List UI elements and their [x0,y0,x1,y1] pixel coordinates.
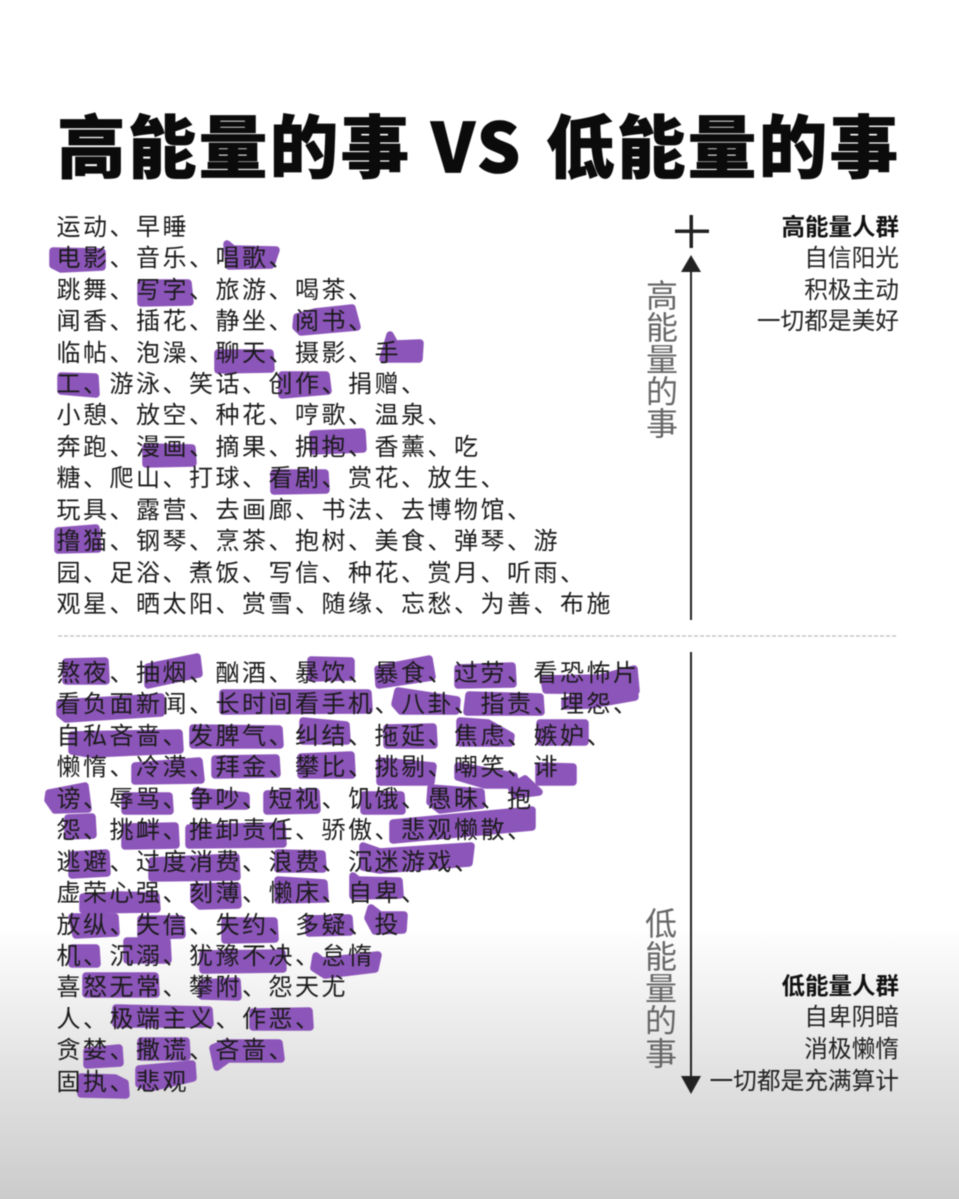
text block: high energy people: 积极主动 [804,277,899,304]
text block: low energy activities: 放纵、失信、失约、多疑、投 [56,912,401,939]
text block: high energy activities: 闻香、插花、静坐、阅书、 [56,308,374,335]
text block: low energy people: 低能量人群 [782,973,899,999]
text block: low energy activities: 贪婪、撒谎、吝啬、 [56,1037,295,1064]
text block: low energy activities: 机、沉溺、犹豫不决、怠惰 [56,943,374,970]
text block: high energy people [757,214,899,335]
text block: high energy activities: 撸猫、钢琴、烹茶、抱树、美食、弹琴、游 [56,528,560,555]
text block: low energy activities: 自私吝啬、发脾气、纠结、拖延、焦虑、嫉妒、 [56,723,613,750]
title [57,94,901,192]
text block: low energy activities: 怨、挑衅、推卸责任、骄傲、悲观懒散、 [56,817,534,844]
text block: low energy people: 自卑阴暗 [804,1004,899,1031]
text block: high energy activities: 观星、晒太阳、赏雪、随缘、忘愁、为善、布施 [56,591,613,618]
text block: high energy activities: 小憩、放空、种花、哼歌、温泉、 [56,402,454,429]
vertical label: low energy [645,906,677,1072]
vertical label: high energy: 事 [646,406,678,442]
vertical label: low energy: 事 [645,1036,677,1072]
text block: high energy activities: 电影、音乐、唱歌、 [56,245,295,272]
title: 低能量的事 [546,94,901,192]
vertical label: low energy: 低 [645,906,677,942]
text block: high energy activities: 工、游泳、笑话、创作、捐赠、 [56,371,428,398]
text block: high energy people: 高能量人群 [782,214,899,240]
text block: low energy people: 消极懒惰 [804,1036,899,1063]
icon: plus sign [675,215,709,248]
text block: low energy activities: 虚荣心强、刻薄、懒床、自卑、 [56,880,428,907]
vertical label: high energy [646,278,678,442]
vertical label: high energy: 的 [646,374,678,410]
text block: low energy activities: 人、极端主义、作恶、 [56,1006,322,1033]
arrow: upward [681,255,701,620]
text block: low energy activities: 固执、悲观 [56,1069,189,1096]
arrow: downward [681,652,701,1094]
text block: low energy activities: 熬夜、抽烟、酗酒、暴饮、暴食、过劳、看恐怖片 [56,660,640,687]
text block: low energy activities: 喜怒无常、攀附、怨天尤 [56,974,348,1001]
vertical label: low energy: 量 [645,971,677,1007]
text block: low energy people: 一切都是充满算计 [709,1068,899,1095]
title: VS [430,94,523,192]
vertical label: high energy: 能 [646,310,678,346]
text block: high energy people: 一切都是美好 [757,308,899,335]
title: 高能量的事 [57,94,412,192]
text block: low energy activities: 谤、辱骂、争吵、短视、饥饿、愚昧、抱 [56,786,534,813]
text block: high energy activities: 玩具、露营、去画廊、书法、去博物馆、 [56,497,534,524]
text block: low energy activities [56,660,640,1096]
text block: high energy activities: 运动、早睡 [56,214,189,241]
highlight strokes: high energy list [53,244,420,550]
text block: high energy activities: 临帖、泡澡、聊天、摄影、手 [56,340,401,367]
highlight strokes: low energy list [48,657,636,1095]
text block: high energy activities: 跳舞、写字、旅游、喝茶、 [56,277,374,304]
text block: low energy people [709,973,899,1095]
text block: high energy people: 自信阳光 [804,245,899,272]
vertical label: low energy: 的 [645,1003,677,1039]
vertical label: low energy: 能 [645,939,677,975]
text block: low energy activities: 逃避、过度消费、浪费、沉迷游戏、 [56,849,480,876]
text block: low energy activities: 懒惰、冷漠、拜金、攀比、挑剔、嘲笑、诽 [56,754,560,781]
text block: high energy activities: 园、足浴、煮饭、写信、种花、赏月、听雨、 [56,560,586,587]
text block: high energy activities: 奔跑、漫画、摘果、拥抱、香薰、吃 [56,434,480,461]
text block: high energy activities [56,214,613,618]
divider [58,635,896,637]
text block: low energy activities: 看负面新闻、长时间看手机、八卦、指责、埋怨、 [56,691,640,718]
vertical label: high energy: 高 [646,278,678,314]
vertical label: high energy: 量 [646,342,678,378]
text block: high energy activities: 糖、爬山、打球、看剧、赏花、放生、 [56,465,507,492]
